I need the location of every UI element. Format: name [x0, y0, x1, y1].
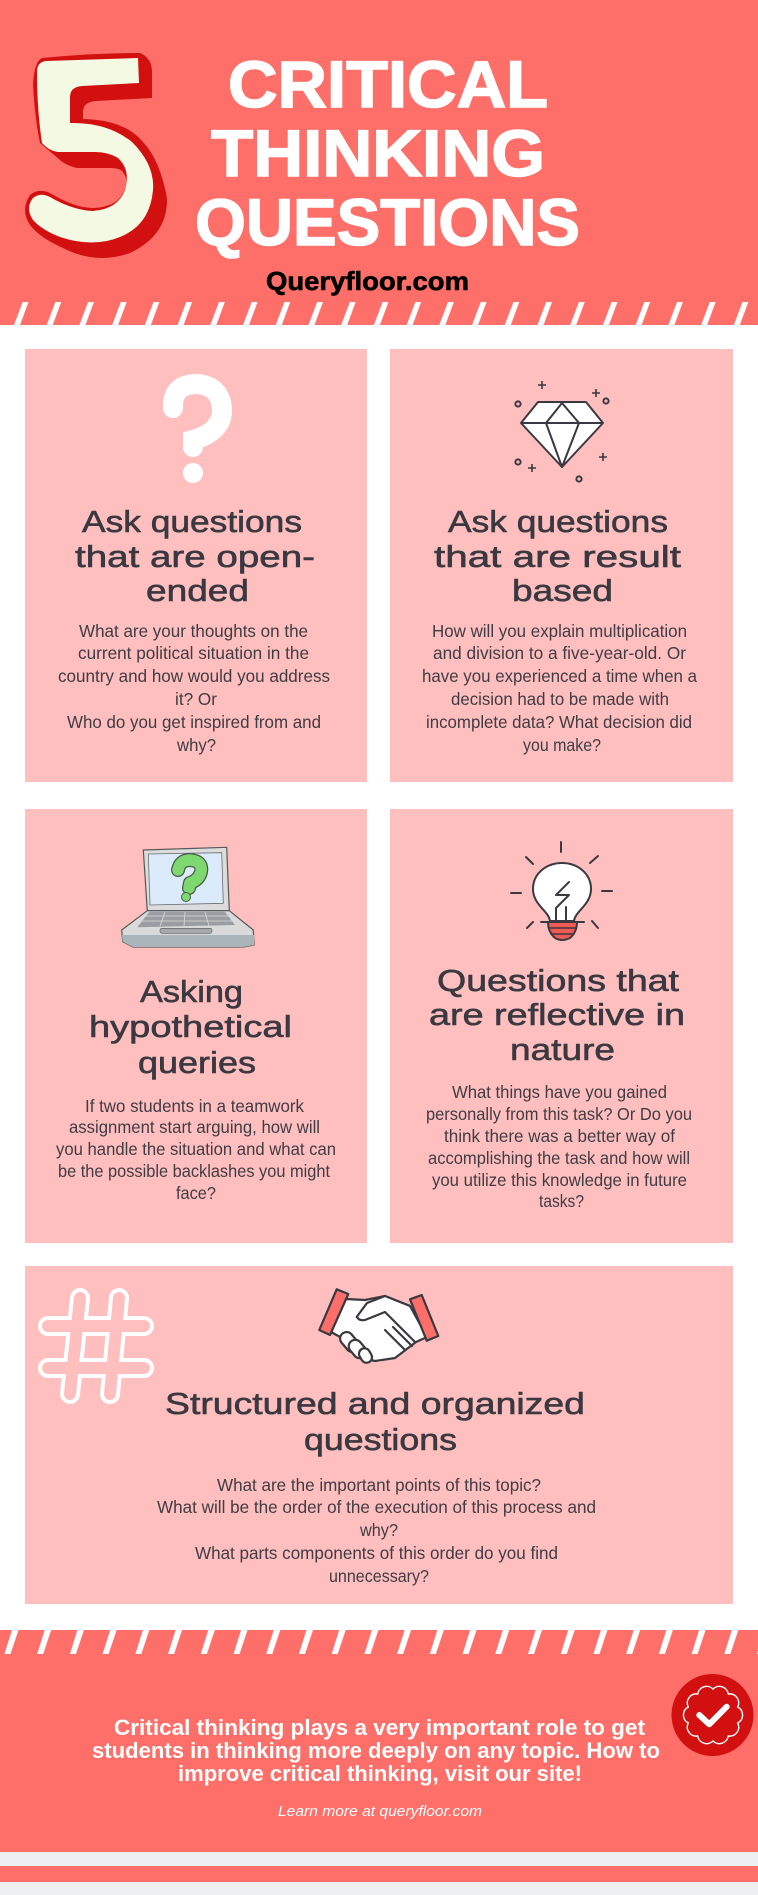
body text: What parts components of this order do you find: [195, 1543, 558, 1563]
body text: why?: [359, 1520, 398, 1540]
body text: it? Or: [175, 689, 217, 709]
icon: verified badge: [672, 1674, 754, 1756]
body text: you handle the situation and what can: [56, 1139, 336, 1159]
body text: How will you explain multiplication: [432, 621, 687, 641]
body text: have you experienced a time when a: [422, 666, 697, 686]
heading: based: [512, 573, 613, 608]
heading: Ask questions: [82, 504, 302, 539]
body text: you make?: [523, 735, 601, 755]
heading: are reflective in: [429, 997, 685, 1032]
closing message: students in thinking more deeply on any topic. How to: [92, 1738, 660, 1763]
body text: current political situation in the: [78, 643, 309, 663]
icon: diamond: [515, 381, 609, 482]
panel: reflective questions: [390, 809, 733, 1243]
body text: incomplete data? What decision did: [426, 712, 692, 732]
icon: handshake: [319, 1289, 438, 1365]
icon: hash symbol: [48, 1298, 144, 1394]
title: THINKING: [211, 116, 545, 190]
heading: Questions that: [437, 963, 679, 998]
body text: why?: [176, 735, 216, 755]
body text: [426, 1082, 692, 1211]
heading: that are open-: [75, 539, 315, 574]
body text: tasks?: [539, 1191, 584, 1211]
panel: open-ended questions: [25, 349, 367, 782]
closing message: [92, 1715, 660, 1786]
site name: Queryfloor.com: [266, 266, 469, 296]
body text: be the possible backlashes you might: [58, 1161, 330, 1181]
body text: country and how would you address: [58, 666, 330, 686]
body text: face?: [176, 1183, 216, 1203]
heading: ended: [146, 573, 249, 608]
body text: If two students in a teamwork: [85, 1096, 304, 1116]
icon: laptop: [122, 847, 254, 947]
icon: question mark: [173, 384, 222, 483]
body text: What things have you gained: [452, 1082, 667, 1102]
body text: think there was a better way of: [444, 1126, 675, 1146]
body text: [56, 1096, 336, 1203]
footer banner: [0, 1630, 758, 1852]
closing message: improve critical thinking, visit our site!: [178, 1761, 582, 1786]
header banner: [0, 0, 758, 325]
panel: result based questions: [390, 349, 733, 782]
heading: [429, 963, 685, 1067]
body text: What are the important points of this topic?: [217, 1475, 541, 1495]
body text: What are your thoughts on the: [79, 621, 308, 641]
icon: light bulb: [511, 842, 612, 940]
heading: queries: [138, 1045, 256, 1080]
title: CRITICAL: [228, 47, 548, 121]
body text: [157, 1475, 596, 1586]
heading: Asking: [140, 974, 243, 1009]
heading: [89, 974, 292, 1080]
body text: decision had to be made with: [451, 689, 669, 709]
body text: and division to a five-year-old. Or: [433, 643, 686, 663]
title: QUESTIONS: [195, 185, 580, 259]
panel: structured questions: [25, 1266, 733, 1604]
body text: you utilize this knowledge in future: [432, 1170, 687, 1190]
heading: hypothetical: [89, 1009, 292, 1044]
body text: assignment start arguing, how will: [69, 1117, 320, 1137]
heading: nature: [510, 1032, 615, 1067]
heading: [75, 504, 315, 608]
heading: questions: [304, 1422, 457, 1457]
heading: Structured and organized: [165, 1386, 585, 1421]
learn more link text: Learn more at queryfloor.com: [278, 1803, 482, 1820]
body text: Who do you get inspired from and: [67, 712, 321, 732]
big number five: [25, 53, 167, 258]
body text: [58, 621, 330, 755]
body text: personally from this task? Or Do you: [426, 1104, 692, 1124]
closing message: Critical thinking plays a very important role to get: [114, 1715, 646, 1740]
bottom bands: [0, 1852, 758, 1895]
panel: hypothetical queries: [25, 809, 367, 1243]
title: [195, 47, 580, 259]
body text: accomplishing the task and how will: [428, 1148, 690, 1168]
heading: [165, 1386, 585, 1457]
heading: Ask questions: [448, 504, 668, 539]
body text: [422, 621, 697, 755]
heading: [434, 504, 681, 608]
body text: What will be the order of the execution of this process and: [157, 1497, 596, 1517]
body text: unnecessary?: [329, 1566, 429, 1586]
heading: that are result: [434, 539, 681, 574]
